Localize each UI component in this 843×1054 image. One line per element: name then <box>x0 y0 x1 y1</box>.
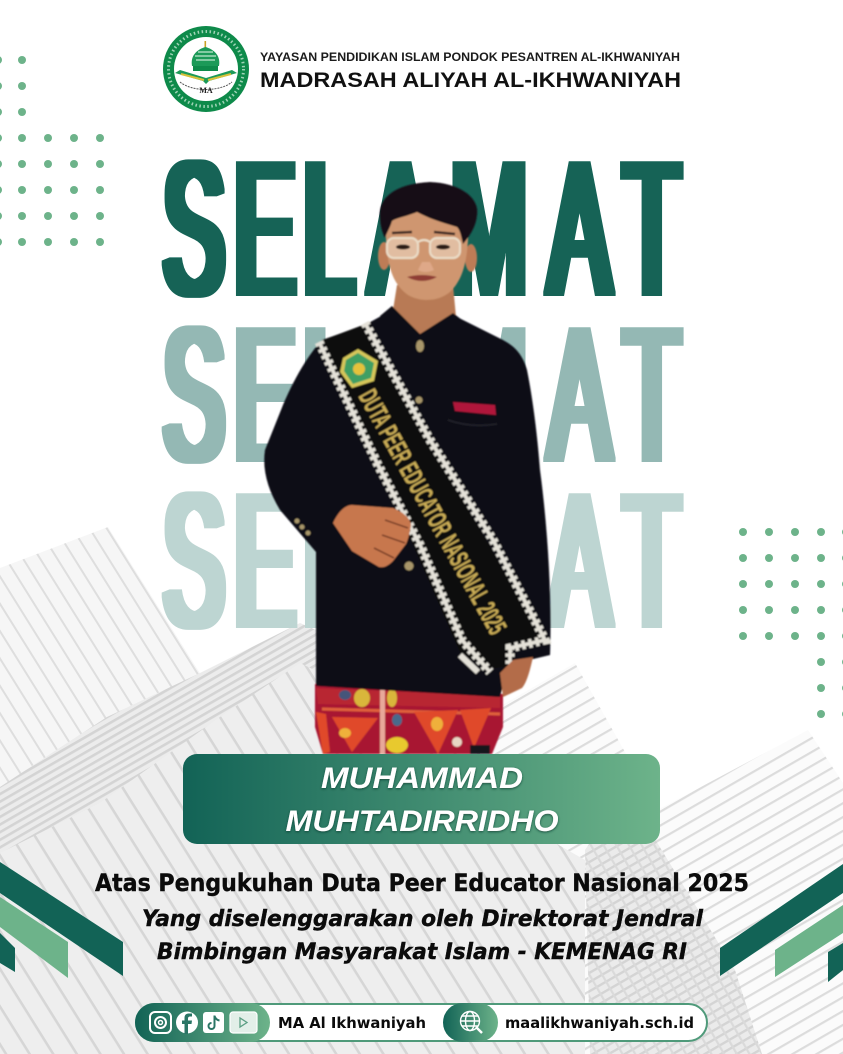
neck <box>393 285 456 336</box>
description text <box>95 869 749 965</box>
name plate <box>183 754 660 844</box>
pocket square <box>453 402 496 415</box>
decoration: left dot grid <box>0 56 104 246</box>
decoration: right dot grid <box>739 528 843 718</box>
icon: youtube <box>230 1012 257 1033</box>
social section <box>135 1003 270 1042</box>
collar <box>380 306 462 360</box>
website section <box>443 1003 498 1042</box>
background: grey building photo <box>0 527 843 1054</box>
name line 2: MUHTADIRRIDHO <box>286 805 558 838</box>
left hand <box>333 505 411 567</box>
sash text: DUTA PEER EDUCATOR NASIONAL 2025 <box>353 384 512 639</box>
hair <box>380 182 477 244</box>
eyes and mouth <box>392 232 455 281</box>
decoration: right chevron bars <box>720 864 843 982</box>
icon: instagram <box>150 1012 171 1033</box>
name line 1: MUHAMMAD <box>321 762 523 795</box>
icon: school logo: MA <box>199 86 213 95</box>
jacket <box>264 310 551 697</box>
glasses <box>387 238 460 258</box>
icon: globe <box>460 1012 482 1033</box>
heading: SELAMAT repeated three times <box>163 122 680 667</box>
ears <box>378 242 390 270</box>
foundation name: YAYASAN PENDIDIKAN ISLAM PONDOK PESANTREN AL-IKHWANIYAH <box>260 50 680 64</box>
social handle: MA Al Ikhwaniyah <box>278 1014 426 1032</box>
jacket buttons <box>294 340 424 570</box>
batik skirt <box>315 684 503 754</box>
pocket line <box>448 420 497 425</box>
sash band <box>323 325 543 669</box>
sash trim <box>319 323 545 672</box>
name plate background <box>183 754 660 844</box>
decoration: left chevron bars <box>0 862 123 978</box>
description line 1: Atas Pengukuhan Duta Peer Educator Nasional 2025 <box>95 869 749 897</box>
school name: MADRASAH ALIYAH AL-IKHWANIYAH <box>260 68 681 92</box>
heading row 2: SELAMAT <box>163 288 680 501</box>
footer contact bar <box>135 1003 707 1042</box>
sash emblem <box>340 349 378 388</box>
icon: facebook <box>176 1012 198 1034</box>
header: foundation and school name <box>260 50 681 92</box>
face <box>386 205 468 300</box>
website address: maalikhwaniyah.sch.id <box>505 1014 694 1032</box>
photo: student wearing sash <box>264 182 551 754</box>
right hand <box>500 657 533 697</box>
icon: school logo <box>163 26 249 112</box>
icon: tiktok <box>203 1012 224 1033</box>
right ear <box>465 244 477 272</box>
heading row 3: SELAMAT <box>163 454 680 667</box>
description line 3: Bimbingan Masyarakat Islam - KEMENAG RI <box>157 940 687 965</box>
description line 2: Yang diselenggarakan oleh Direktorat Jendral <box>142 907 703 932</box>
heading row 1: SELAMAT <box>163 122 680 335</box>
footer pill outline <box>136 1004 707 1041</box>
